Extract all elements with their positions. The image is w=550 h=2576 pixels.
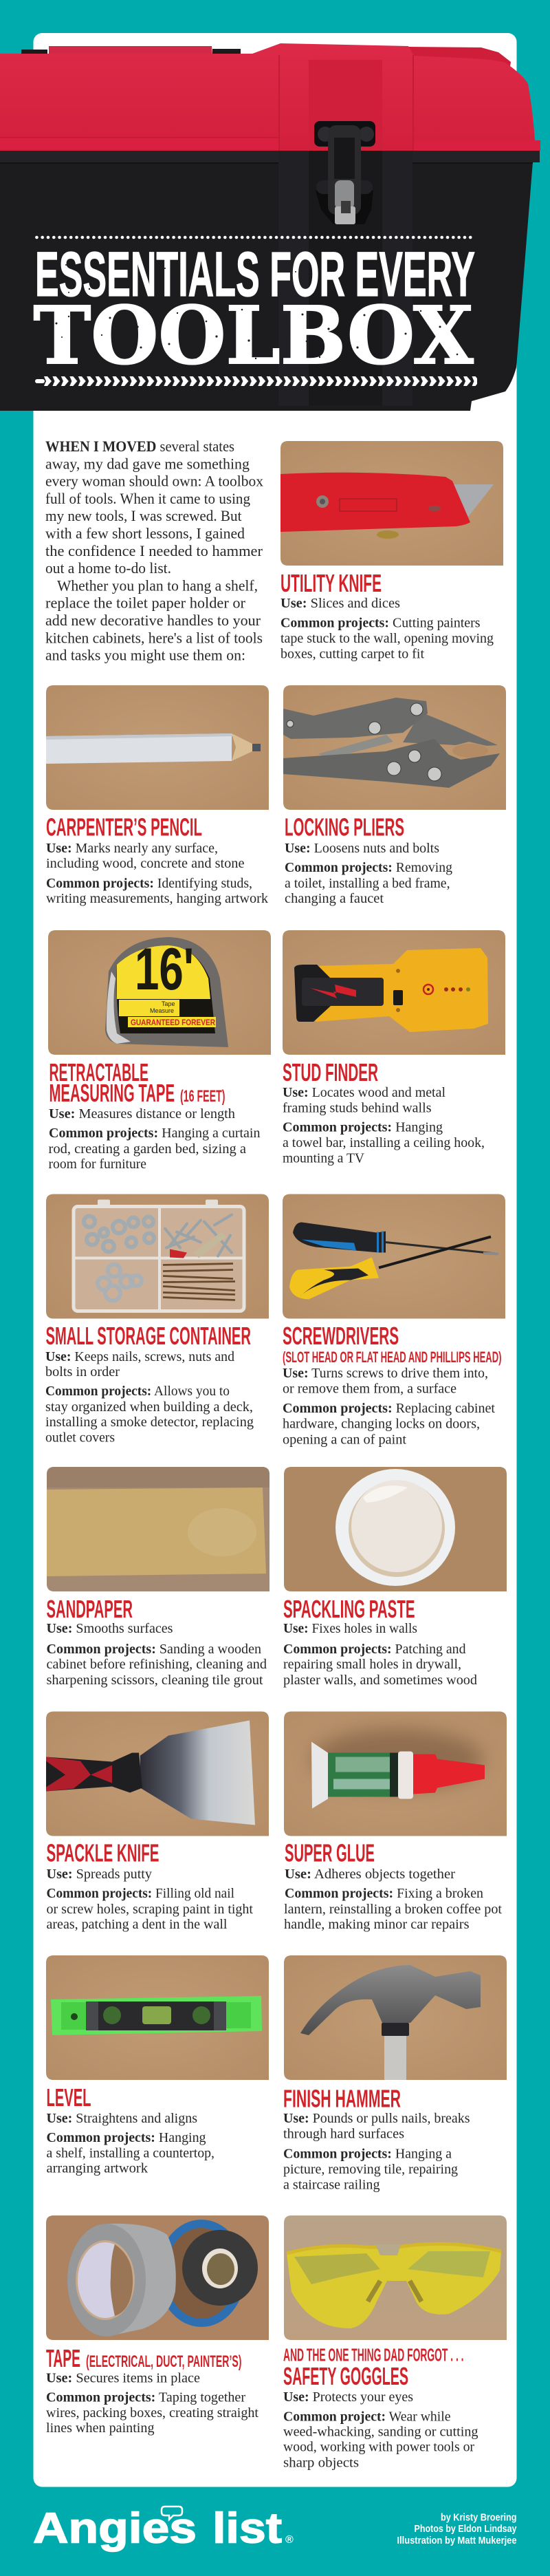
tool: carpenter's pencil (46, 685, 269, 906)
tool: super glue (284, 1712, 507, 1932)
text: safety goggles: Common project: Wear while (283, 2409, 451, 2425)
text: locking pliers: changing a faucet (285, 891, 384, 906)
text: tape: Use: Secures items in place (46, 2371, 200, 2386)
text: stud finder (283, 1085, 485, 1166)
heading: finish hammer: FINISH HAMMER (283, 2085, 401, 2112)
footer: credits: Photos by Eldon Lindsay (414, 2523, 517, 2535)
text: finish hammer: Use: Pounds or pulls nails, breaks (283, 2111, 470, 2126)
heading: retractable measuring tape (50, 1058, 226, 1107)
text: finish hammer: picture, removing tile, repairing (283, 2162, 458, 2177)
footer: Angie's list logo: Angies (33, 2504, 197, 2553)
text: locking pliers: Common projects: Removing (285, 860, 452, 875)
tool: small storage container (45, 1194, 269, 1445)
tool: stud finder (283, 930, 505, 1166)
text: super glue: handle, making minor car repairs (284, 1917, 470, 1932)
text: screwdrivers (283, 1366, 495, 1448)
heading: and the one thing dad forgot, safety goggles: SAFETY GOGGLES (283, 2362, 408, 2390)
photo: utility knife (280, 441, 503, 566)
text: small storage container: Common projects: Allows you to (45, 1384, 230, 1399)
text: safety goggles: sharp objects (283, 2455, 359, 2470)
title line: Toolbox: TOOLBOX (33, 290, 474, 383)
tool: level (46, 1955, 269, 2176)
text: screwdrivers: Common projects: Replacing cabinet (283, 1401, 495, 1416)
text: carpenter's pencil: Common projects: Identifying studs, (46, 876, 252, 891)
heading: utility knife: UTILITY KNIFE (280, 569, 382, 597)
text: spackling paste (283, 1621, 477, 1688)
toolbox lid (0, 43, 540, 151)
heading: retractable measuring tape: (16 FEET) (180, 1087, 226, 1106)
text: measuring tape: Common projects: Hanging a curtain (49, 1126, 260, 1141)
heading: screwdrivers: SCREWDRIVERS (283, 1322, 399, 1350)
heading: retractable measuring tape: MEASURING TAPE (50, 1079, 175, 1107)
photo: locking pliers (283, 685, 506, 810)
text: sandpaper: sharpening scissors, cleaning tile grout (47, 1673, 263, 1688)
text: safety goggles: weed-whacking, sanding or cutting (283, 2425, 478, 2440)
heading: locking pliers: LOCKING PLIERS (285, 813, 404, 841)
text: screwdrivers: opening a can of paint (283, 1432, 406, 1448)
text: tape (46, 2371, 258, 2436)
intro text: out a home to-do list. (45, 559, 171, 577)
text: small storage container: installing a smoke detector, replacing (45, 1415, 254, 1430)
text: carpenter's pencil: writing measurements, hanging artwork (46, 891, 268, 906)
text: utility knife: Use: Slices and dices (280, 596, 400, 611)
text: screwdrivers: hardware, changing locks on doors, (283, 1416, 480, 1431)
footer: Angie's list logo: list (212, 2504, 282, 2553)
text: sandpaper: Use: Smooths surfaces (47, 1621, 173, 1636)
footer: Angie's list logo (33, 2504, 294, 2553)
text: level: Use: Straightens and aligns (47, 2111, 197, 2126)
tool: sandpaper (47, 1467, 270, 1688)
text: utility knife: Common projects: Cutting painters (280, 615, 481, 630)
text: stud finder: mounting a TV (283, 1150, 365, 1166)
text: utility knife (280, 596, 494, 662)
text: tape: Common projects: Taping together (46, 2390, 245, 2405)
heading: spackling paste: SPACKLING PASTE (283, 1595, 415, 1623)
photo: sandpaper (47, 1467, 270, 1591)
heading: tape: TAPE (46, 2344, 80, 2372)
text: stud finder: Common projects: Hanging (283, 1120, 443, 1135)
toolbox lid rear tabs (21, 46, 511, 76)
heading: level: LEVEL (47, 2083, 91, 2112)
text: utility knife: boxes, cutting carpet to fit (280, 647, 424, 662)
photo: spackling paste (284, 1467, 507, 1591)
text: screwdrivers: or remove them from, a surface (283, 1382, 456, 1397)
lid lip (0, 55, 540, 151)
intro text (45, 438, 263, 664)
heading: stud finder: STUD FINDER (283, 1058, 378, 1086)
heading: and the one thing dad forgot, safety goggles (283, 2345, 463, 2390)
photo: stud finder (283, 930, 505, 1055)
text: finish hammer: a staircase railing (283, 2177, 380, 2192)
photo: level (46, 1955, 269, 2080)
intro text: and tasks you might use them on: (45, 647, 245, 664)
heading: sandpaper: SANDPAPER (47, 1595, 133, 1623)
intro text: my new tools, I was screwed. But (45, 507, 242, 524)
intro text: full of tools. When it came to using (45, 490, 250, 507)
text: locking pliers: a toilet, installing a bed frame, (285, 876, 450, 891)
text: super glue: Use: Adheres objects together (285, 1867, 455, 1882)
tool: locking pliers (283, 685, 506, 906)
heading: spackle knife: SPACKLE KNIFE (47, 1838, 160, 1867)
heading: retractable measuring tape: RETRACTABLE (50, 1058, 148, 1086)
tool: tape (46, 2215, 269, 2436)
intro text: replace the toilet paper holder or (45, 594, 246, 612)
intro text: Whether you plan to hang a shelf, (57, 577, 258, 594)
text: locking pliers: Use: Loosens nuts and bolts (285, 841, 439, 856)
text: carpenter's pencil: including wood, concrete and stone (46, 856, 245, 871)
heading: carpenter's pencil: CARPENTER’S PENCIL (46, 813, 202, 841)
heading: tape: (ELECTRICAL, DUCT, PAINTER’S) (86, 2352, 242, 2371)
tool: spackle knife (46, 1712, 269, 1932)
text: tape: lines when painting (46, 2421, 154, 2436)
text: finish hammer: Common projects: Hanging a (283, 2147, 452, 2162)
intro text: every woman should own: A toolbox (45, 473, 263, 490)
tool: finish hammer (283, 1955, 507, 2192)
text: stud finder: framing studs behind walls (283, 1101, 432, 1116)
heading: tape (46, 2344, 242, 2372)
tool: retractable measuring tape (48, 930, 271, 1172)
text: locking pliers (285, 841, 452, 906)
text: small storage container: bolts in order (45, 1364, 120, 1380)
text: measuring tape: room for furniture (48, 1157, 146, 1172)
footer: Angie's list logo: ® (285, 2534, 294, 2546)
text: level: Common projects: Hanging (47, 2130, 206, 2145)
photo: storage container (46, 1194, 269, 1318)
text: spackle knife: areas, patching a dent in the wall (47, 1917, 228, 1932)
toolbox rim (0, 151, 540, 162)
title arrow rule (35, 376, 477, 386)
intro text: add new decorative handles to your (45, 612, 261, 629)
heading: screwdrivers (283, 1322, 502, 1366)
photo: measuring tape: Tape (162, 1000, 175, 1007)
text: safety goggles (283, 2390, 478, 2470)
text: stud finder: a towel bar, installing a ceiling hook, (283, 1135, 485, 1150)
text: spackle knife: Use: Spreads putty (47, 1867, 152, 1882)
metal clasp (314, 121, 375, 224)
photo: measuring tape (48, 930, 271, 1055)
vertical clasp band (278, 151, 412, 406)
footer: credits: by Kristy Broering (441, 2511, 517, 2524)
text: super glue: Common projects: Fixing a broken (285, 1886, 483, 1901)
photo: finish hammer (284, 1955, 507, 2080)
text: finish hammer (283, 2111, 470, 2192)
text: small storage container (45, 1349, 254, 1445)
text: spackle knife: Common projects: Filling old nail (47, 1886, 234, 1901)
text: spackling paste: repairing small holes in drywall, (283, 1657, 461, 1672)
text: level (47, 2111, 214, 2176)
photo: carpenter's pencil (46, 685, 269, 810)
text: finish hammer: through hard surfaces (283, 2126, 404, 2141)
intro text: the confidence I needed to hammer (45, 542, 263, 559)
text: sandpaper (47, 1621, 267, 1688)
clasp recess (309, 60, 382, 151)
text: spackling paste: Use: Fixes holes in walls (283, 1621, 417, 1636)
photo: safety goggles (284, 2215, 507, 2340)
tool: safety goggles (283, 2215, 507, 2470)
intro text: with a few short lessons, I gained (45, 524, 245, 542)
intro text: away, my dad gave me something (45, 455, 250, 472)
text: safety goggles: Use: Protects your eyes (283, 2390, 413, 2405)
photo: super glue (284, 1712, 507, 1836)
toolbox body (0, 149, 540, 411)
tool: screwdrivers (283, 1194, 505, 1448)
heading: super glue: SUPER GLUE (285, 1838, 375, 1867)
photo: tape rolls (46, 2215, 269, 2340)
photo: measuring tape: GUARANTEED FOREVER (131, 1018, 215, 1027)
text: spackling paste: plaster walls, and sometimes wood (283, 1673, 477, 1688)
intro text: WHEN I MOVED several states (45, 438, 234, 455)
footer: credits (397, 2511, 517, 2546)
intro text: kitchen cabinets, here's a list of tools (45, 629, 263, 646)
photo: screwdrivers (283, 1194, 505, 1318)
text: level: a shelf, installing a countertop, (47, 2145, 214, 2160)
title distress speckles (52, 264, 458, 359)
text: super glue: lantern, reinstalling a broken coffee pot (284, 1902, 502, 1917)
text: utility knife: tape stuck to the wall, opening moving (280, 631, 494, 646)
text: level: arranging artwork (47, 2160, 148, 2176)
text: small storage container: Use: Keeps nails, screws, nuts and (45, 1349, 234, 1364)
text: measuring tape: Use: Measures distance or length (49, 1106, 235, 1121)
text: screwdrivers: Use: Turns screws to drive them into, (283, 1366, 488, 1381)
text: measuring tape: rod, creating a garden bed, sizing a (48, 1141, 246, 1157)
text: spackle knife (47, 1867, 253, 1932)
logo speech bubble (162, 2507, 182, 2520)
text: super glue (284, 1867, 502, 1932)
text: tape: wires, packing boxes, creating straight (46, 2405, 258, 2421)
text: sandpaper: cabinet before refinishing, cleaning and (47, 1657, 267, 1672)
text: sandpaper: Common projects: Sanding a wooden (47, 1642, 261, 1657)
text: spackling paste: Common projects: Patching and (283, 1642, 466, 1657)
hero: toolbox illustration (0, 43, 540, 411)
text: small storage container: stay organized when building a deck, (45, 1399, 253, 1415)
text: stud finder: Use: Locates wood and metal (283, 1085, 446, 1100)
text: carpenter's pencil: Use: Marks nearly any surface, (46, 841, 218, 856)
photo: measuring tape: 16' (135, 936, 194, 1002)
text: carpenter's pencil (46, 841, 268, 906)
text: safety goggles: wood, working with power tools or (283, 2440, 474, 2455)
title dotted rule (35, 235, 472, 240)
tool: spackling paste (283, 1467, 507, 1688)
heading: small storage container: SMALL STORAGE CONTAINER (45, 1322, 251, 1350)
footer: credits: Illustration by Matt Mukerjee (397, 2535, 517, 2546)
text: measuring tape (48, 1106, 260, 1172)
photo: spackle knife (46, 1712, 269, 1836)
tool: utility knife (280, 441, 503, 662)
text: small storage container: outlet covers (45, 1430, 115, 1445)
text: spackle knife: or screw holes, scraping paint in tight (47, 1902, 253, 1917)
photo: measuring tape: Measure (150, 1007, 174, 1014)
